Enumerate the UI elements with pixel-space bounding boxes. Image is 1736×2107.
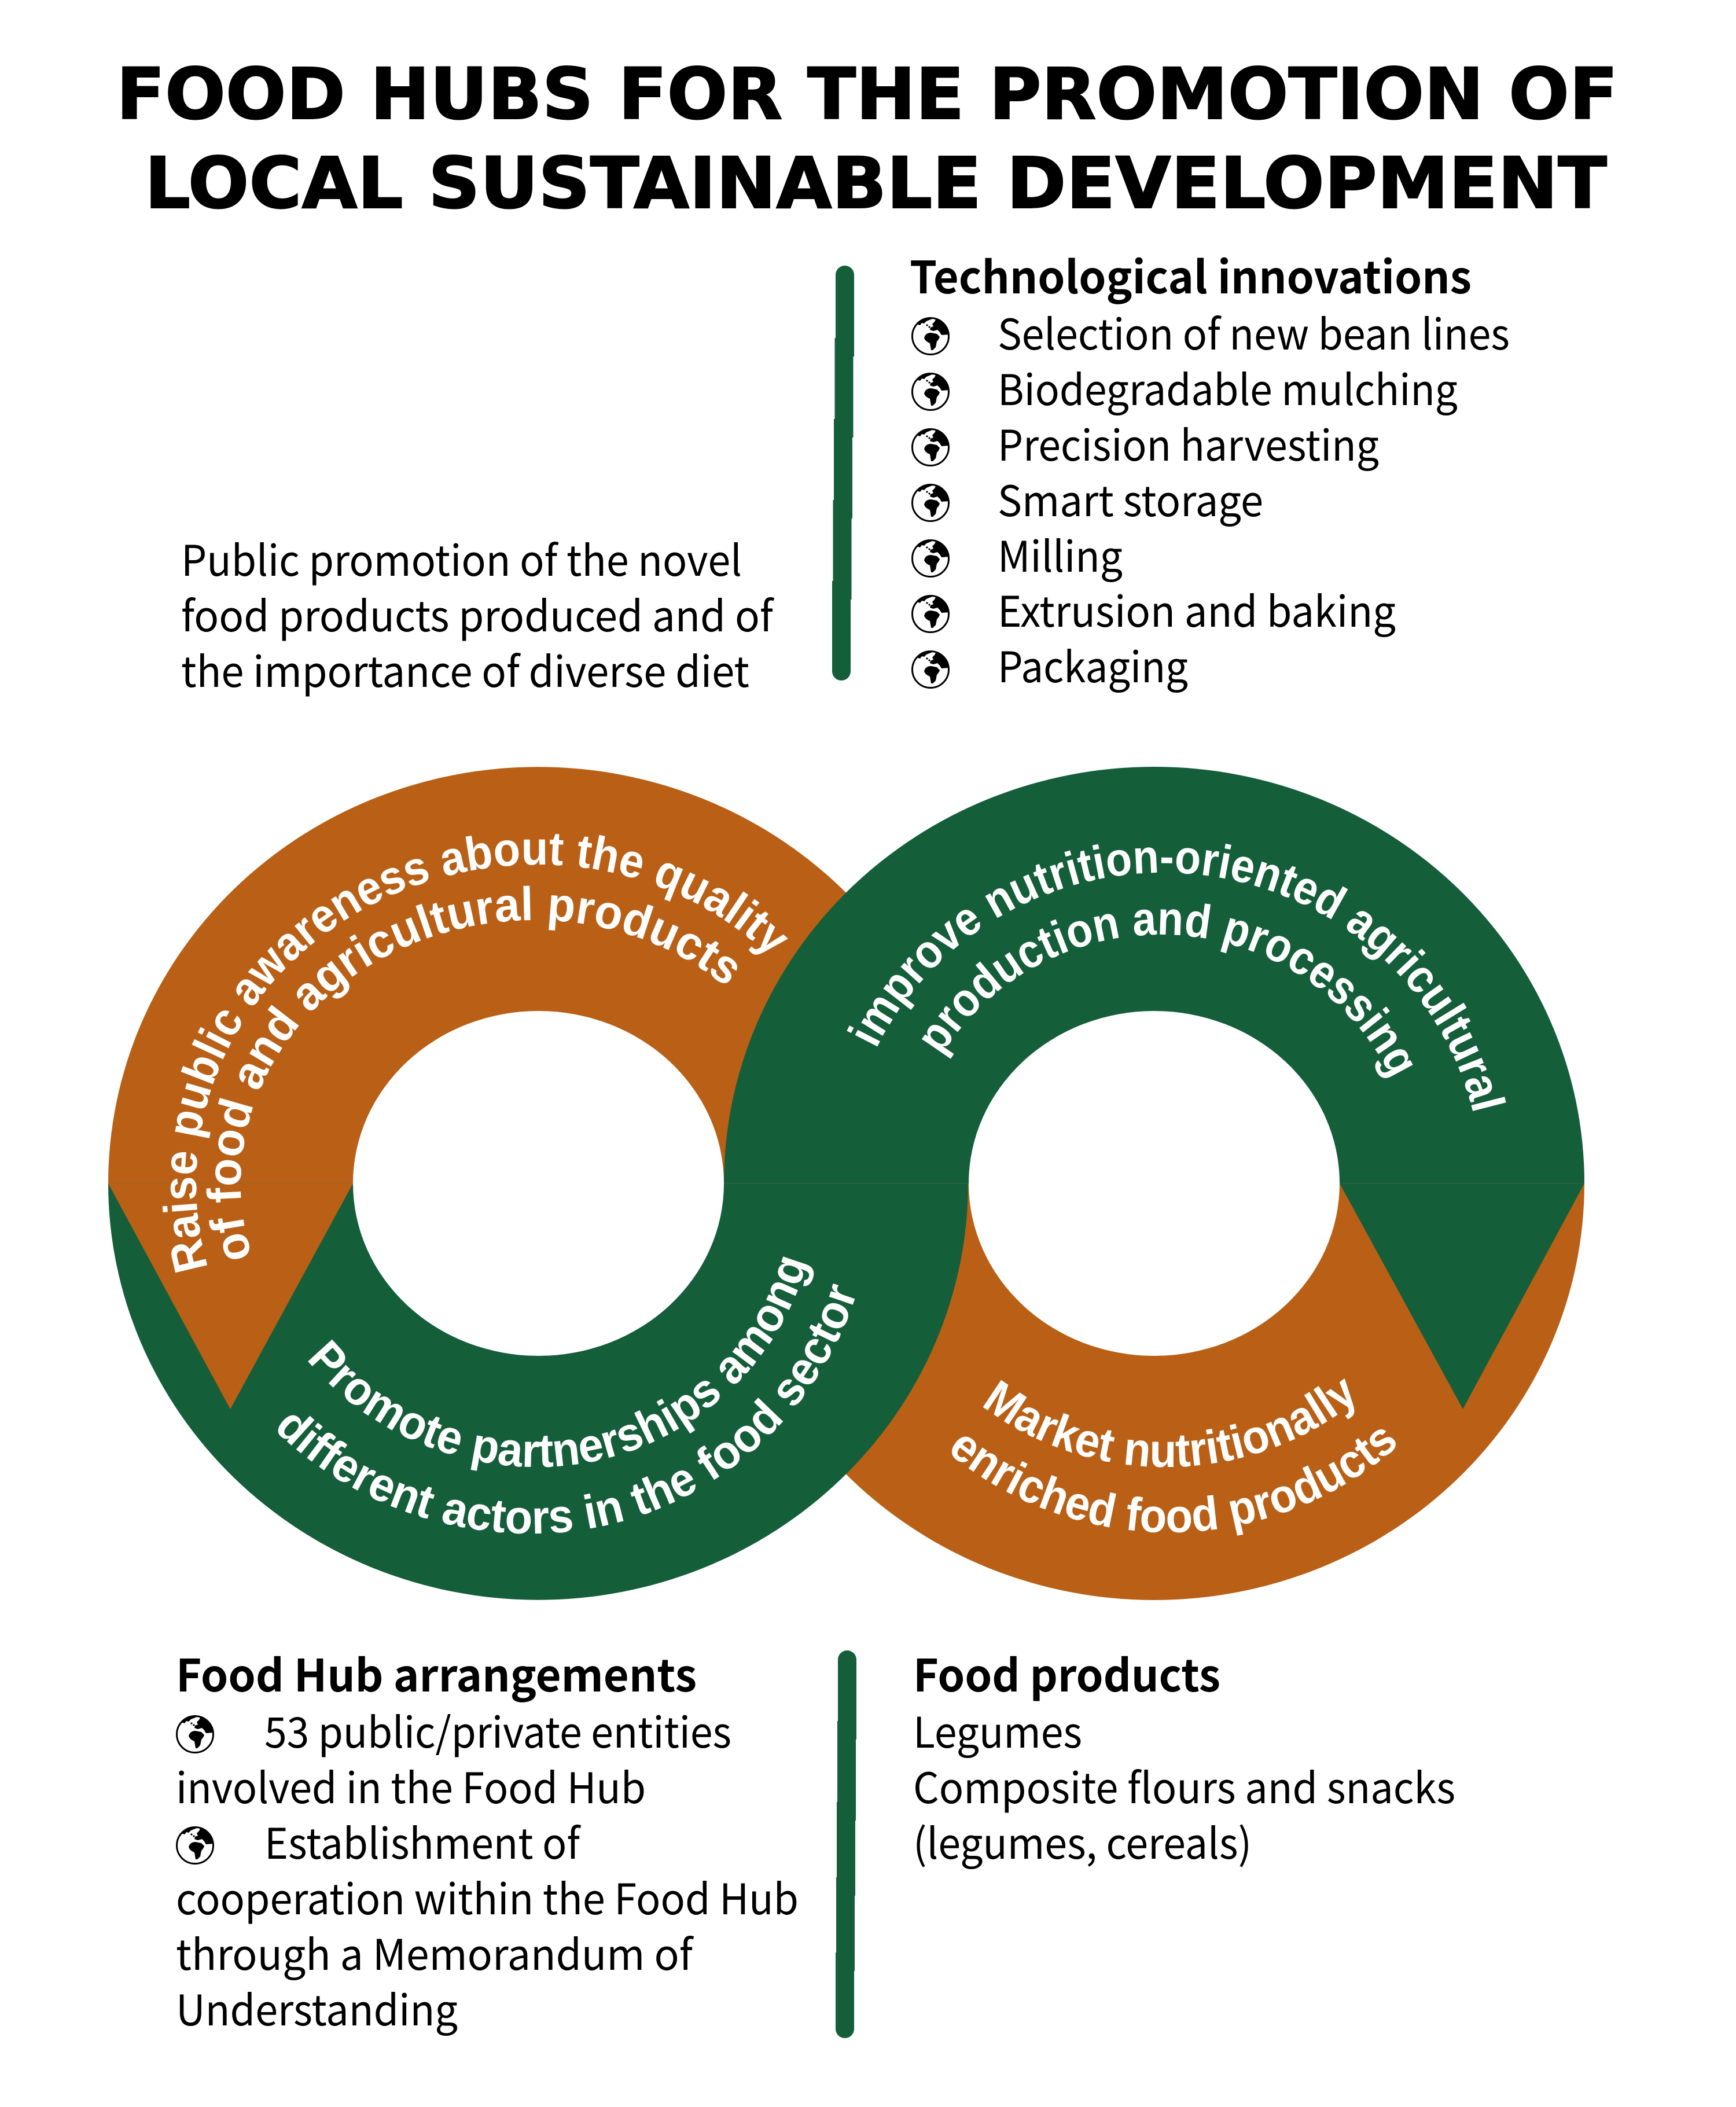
divider bar: top <box>841 275 845 671</box>
list: products: Legumes <box>913 1699 1082 1760</box>
curved label: improve nutrition-oriented agricultural: improve nutrition-oriented agricultural <box>847 844 1506 1111</box>
list: innovations: Smart storage <box>998 468 1263 529</box>
list: products: Composite flours and snacks <box>913 1755 1455 1816</box>
text block: public promotion <box>181 527 774 700</box>
segment: orange left arrow tip <box>108 1183 353 1409</box>
panel: food products <box>913 1641 1455 1871</box>
list: innovations <box>912 301 1510 695</box>
list: innovations: Packaging <box>998 634 1188 695</box>
list: arrangements: involved in the Food Hub <box>176 1755 646 1816</box>
list: innovations: Extrusion and baking <box>998 578 1396 639</box>
curved label: enriched food products: enriched food products <box>952 1429 1396 1536</box>
curved label: of food and agricultural products: of food and agricultural products <box>206 885 737 1259</box>
infinity diagram <box>108 767 1584 1600</box>
segment: green lower left arc <box>108 1183 968 1600</box>
text block: public promotion: food products produced and of <box>181 583 774 644</box>
title: LOCAL SUSTAINABLE DEVELOPMENT <box>145 142 1607 225</box>
text block: public promotion: Public promotion of the novel <box>181 527 742 589</box>
title: FOOD HUBS FOR THE PROMOTION OF <box>116 53 1618 135</box>
segment: orange upper left arc <box>108 767 968 1183</box>
list: arrangements: 53 public/private entities <box>264 1699 731 1760</box>
curved label: market nutritionally: Market nutritionally <box>983 1378 1354 1468</box>
heading: food products: Food products <box>913 1641 1220 1705</box>
list: innovations: Precision harvesting <box>998 412 1379 473</box>
segment: green upper right arc <box>724 767 1584 1183</box>
panel: technological innovations <box>910 242 1510 695</box>
title <box>116 53 1618 225</box>
segment: green right arrow tip <box>1340 1183 1584 1409</box>
list: arrangements: cooperation within the Food Hub <box>176 1866 799 1927</box>
segment: orange lower right arc <box>724 1183 1584 1600</box>
panel: food hub arrangements <box>176 1641 799 2038</box>
list: products: (legumes, cereals) <box>913 1810 1252 1871</box>
heading: technological innovations: Technological innovations <box>910 242 1472 307</box>
text block: public promotion: the importance of diverse diet <box>181 638 749 700</box>
list: arrangements <box>176 1699 799 2038</box>
list: innovations: Selection of new bean lines <box>998 301 1510 362</box>
list: innovations: Milling <box>998 523 1123 584</box>
list: innovations: Biodegradable mulching <box>998 356 1458 418</box>
curved label: different actors in the food sector: different actors in the food sector <box>278 1284 855 1534</box>
heading: food hub arrangements: Food Hub arrangements <box>176 1641 697 1705</box>
list: products <box>913 1699 1455 1871</box>
divider bar: bottom <box>845 1660 847 2029</box>
list: arrangements: Understanding <box>176 1977 458 2038</box>
curved label: raise public awareness: Raise public awareness about the quality <box>162 834 788 1273</box>
curved label: production and processing: production and processing <box>922 903 1413 1078</box>
list: arrangements: Establishment of <box>264 1810 581 1871</box>
list: arrangements: through a Memorandum of <box>176 1921 694 1983</box>
curved label: promote partnerships among: Promote partnerships among <box>308 1256 814 1471</box>
